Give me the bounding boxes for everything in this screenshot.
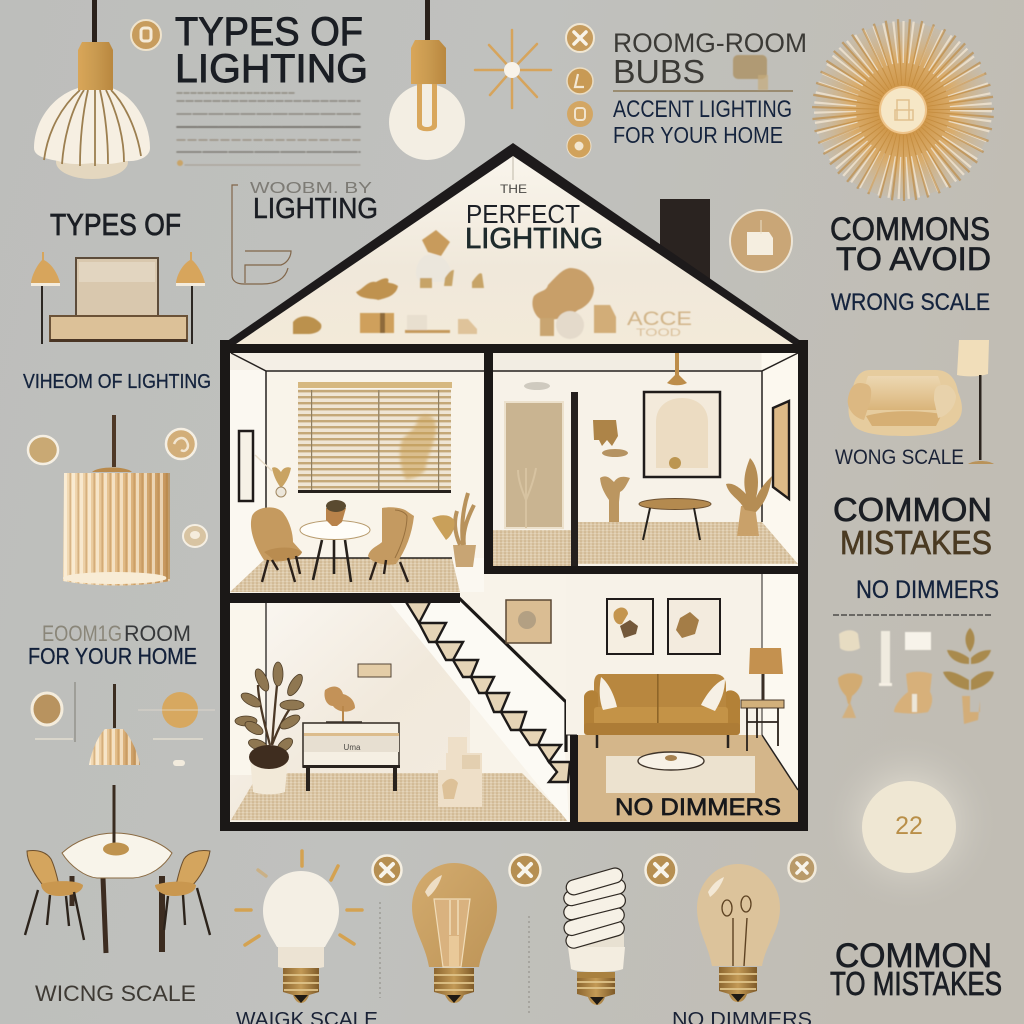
- icon: small sunburst: [475, 30, 551, 108]
- roof attic: PERFECT: [466, 199, 580, 229]
- icon: dining table with chairs: [25, 785, 210, 953]
- text block: room to room for your home: EOOM1G: [42, 621, 122, 646]
- room: lower right lounge: [506, 574, 798, 824]
- plant: [235, 662, 305, 794]
- text block: wisdom of lighting: VIHEOM OF LIGHTING: [23, 371, 211, 393]
- room: stairs: [390, 598, 570, 823]
- house frame rooms: [220, 340, 808, 831]
- text block: wood by lighting: LIGHTING: [253, 193, 378, 225]
- heading: commons to avoid: COMMONS: [830, 211, 990, 247]
- roof attic: [220, 143, 808, 346]
- heading: room-by-room bulbs: FOR YOUR HOME: [613, 122, 783, 148]
- heading: room-by-room bulbs: ACCENT LIGHTING: [613, 96, 792, 123]
- text block: room to room for your home: [28, 621, 197, 683]
- icon: amber incandescent bulb: [412, 863, 497, 1003]
- bulb divider and labels: [236, 902, 812, 1024]
- floor lamp and side table: [741, 648, 784, 751]
- icon: cream sofa with floor lamp: [848, 340, 994, 464]
- heading: types of lighting: TYPES OF: [175, 10, 363, 54]
- icon: spiral cfl bulb: [562, 866, 627, 1005]
- heading: common mistakes: [833, 491, 992, 567]
- heading: common mistakes: COMMON: [833, 491, 992, 528]
- heading: common mistakes: MISTAKES: [840, 524, 992, 561]
- sofa: [584, 674, 740, 748]
- structural frame walls: [220, 340, 808, 831]
- heading: common to mistakes: [830, 937, 1002, 1010]
- icons: badge column: [566, 24, 594, 158]
- icons: decor cluster: [838, 628, 994, 724]
- icon: pebble with number 22: 22: [895, 812, 923, 840]
- icons: round detail badges: [28, 429, 207, 547]
- icon: ribbed pendant lamp: [34, 0, 150, 179]
- room: lower left under stairs: [230, 603, 569, 821]
- icon: pebble with number 22: [821, 735, 997, 911]
- plant and pot: [432, 493, 476, 567]
- text block: wood by lighting: WOOBM. BY: [250, 180, 372, 197]
- heading: room-by-room bulbs: ROOMG-ROOM: [613, 28, 807, 58]
- roof attic: LIGHTING: [465, 223, 603, 255]
- icon: small pleated pendant: [89, 684, 140, 765]
- text block: no dimmers right: NO DIMMERS: [856, 576, 999, 604]
- room: upper right hall: [493, 352, 799, 568]
- console: [303, 638, 400, 791]
- text block: wrong scale right: WRONG SCALE: [831, 289, 990, 316]
- text block: wrong scale lower left: WICNG SCALE: [35, 981, 196, 1006]
- heading: room-by-room bulbs: [613, 28, 807, 168]
- heading: room-by-room bulbs: BUBS: [613, 53, 705, 90]
- chair right: [368, 507, 414, 582]
- heading: common to mistakes: COMMON: [835, 937, 992, 975]
- heading: types of lighting: [175, 10, 368, 91]
- chair left: [251, 507, 302, 582]
- icon: clear filament bulb: [697, 864, 780, 1002]
- icon: frosted bulb with rays: [236, 851, 362, 1003]
- divider text line: [35, 783, 193, 785]
- icons: x badges: [372, 854, 816, 886]
- chimney: [660, 199, 710, 299]
- text block: small list lines: [177, 93, 360, 166]
- table with vase: [300, 500, 370, 582]
- heading: types of lighting: LIGHTING: [175, 47, 368, 91]
- roof attic: ACCE: [627, 309, 692, 330]
- console: Uma: [344, 743, 361, 752]
- icons: lower left badges: [32, 682, 215, 766]
- text block: room to room for your home: ROOM: [124, 621, 191, 646]
- rug and coffee table: [606, 752, 755, 793]
- label: no dimmers in room: NO DIMMERS: [615, 794, 781, 821]
- icon: gold circle badge top left: [131, 20, 161, 50]
- room: upper left: [230, 352, 484, 592]
- art prints: [506, 599, 720, 654]
- heading: types of: TYPES OF: [50, 207, 181, 242]
- heading: commons to avoid: [830, 211, 991, 277]
- roof attic: THE: [500, 182, 527, 196]
- icon: gold sunburst fixture: [815, 22, 991, 198]
- roof attic: TOOD: [636, 327, 681, 339]
- icon: globe pendant: [389, 0, 465, 160]
- text block: wong scale: WONG SCALE: [835, 446, 964, 469]
- icon: drum pendant shade: [63, 415, 170, 586]
- icon: attic round badge: [730, 210, 792, 272]
- text block: wood by lighting: [232, 180, 378, 284]
- icon: console with wall lamps: [31, 252, 205, 344]
- stacked boxes: [438, 737, 482, 807]
- text block: room to room for your home: FOR YOUR HOME: [28, 643, 197, 669]
- house: cross-section illustration: [220, 143, 808, 831]
- heading: commons to avoid: TO AVOID: [836, 241, 991, 277]
